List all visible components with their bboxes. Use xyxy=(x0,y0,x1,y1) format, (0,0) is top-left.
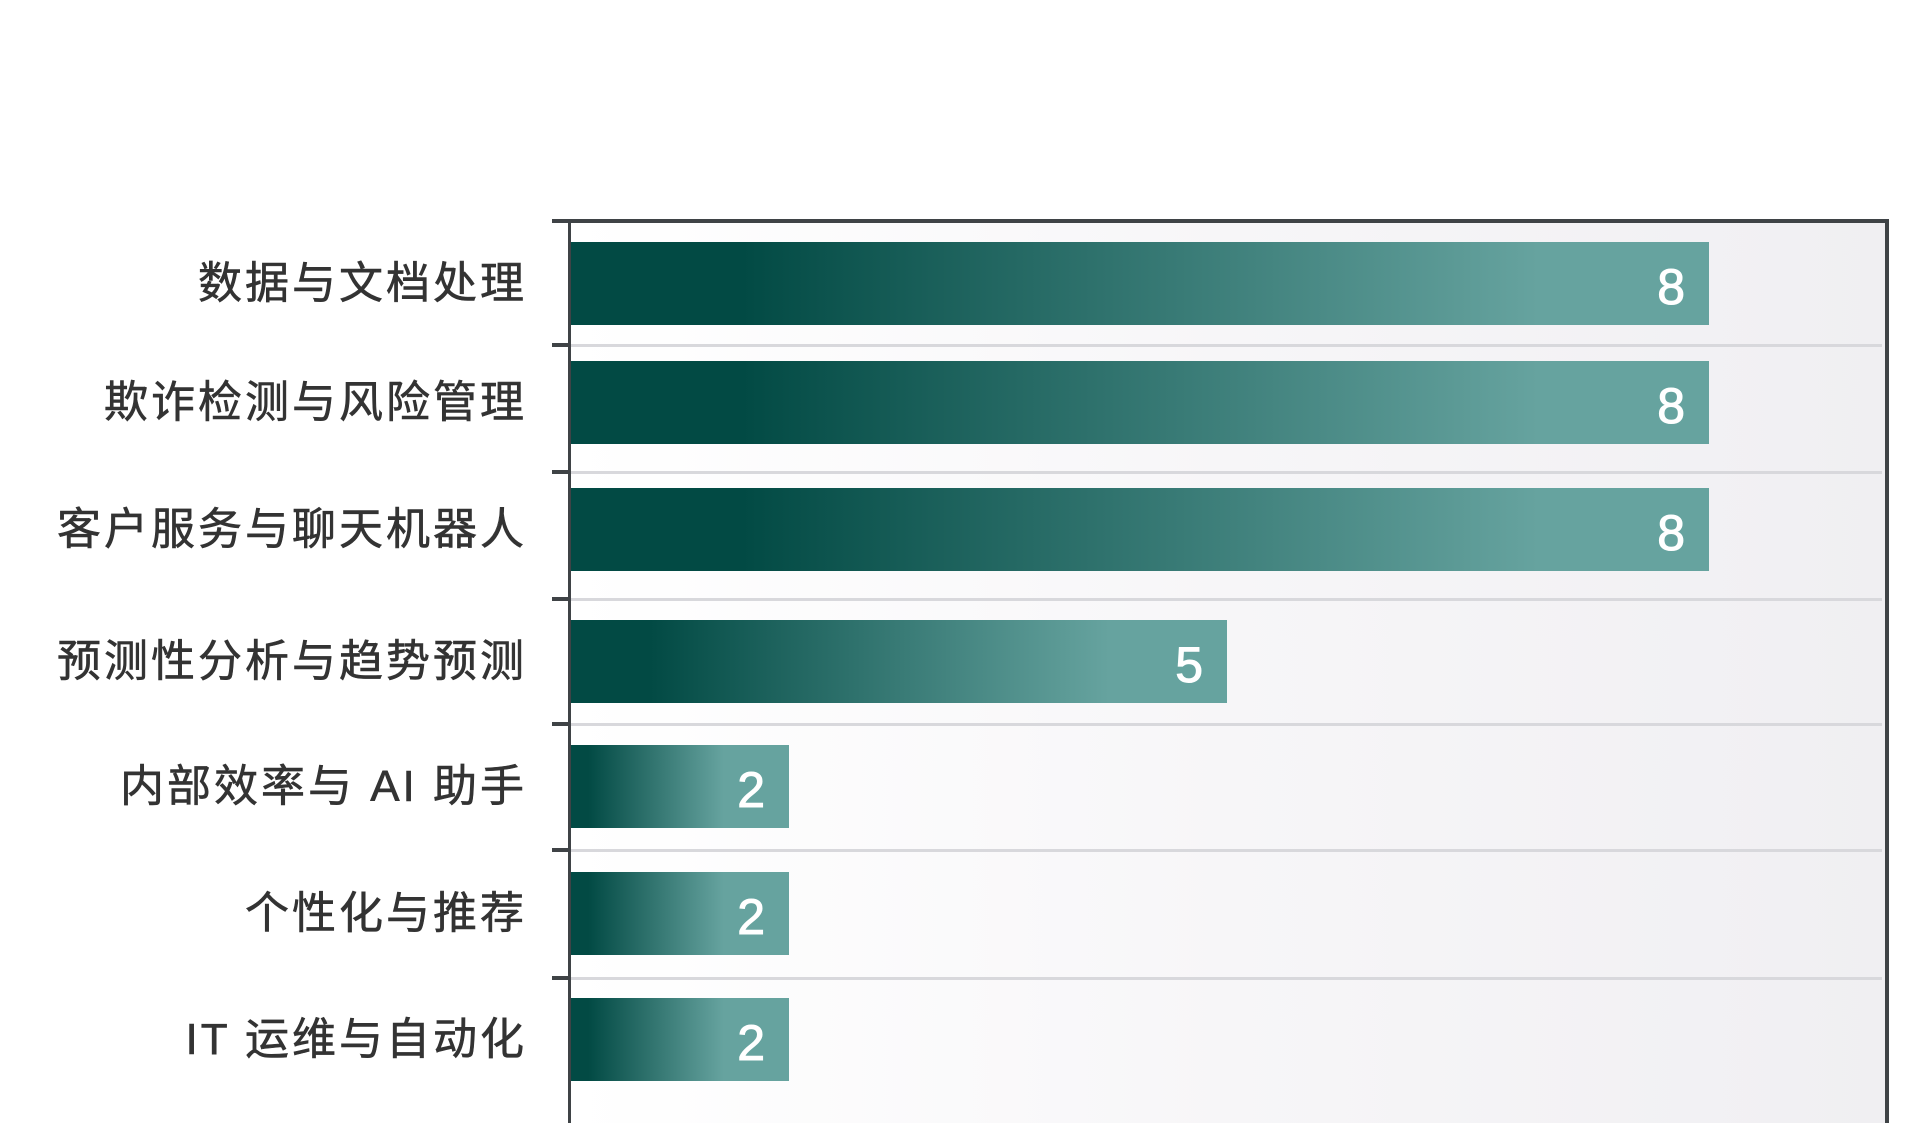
bar 4 xyxy=(571,620,1227,703)
chart frame xyxy=(568,219,1889,1123)
bar 5 xyxy=(571,745,789,828)
label 7: IT 运维与自动化 xyxy=(185,1015,527,1064)
label 4: 预测性分析与趋势预测 xyxy=(57,637,527,686)
bar 4: 5 xyxy=(1175,637,1203,693)
bar 3 xyxy=(571,488,1709,571)
label 6: 个性化与推荐 xyxy=(245,889,527,938)
bar 1: 8 xyxy=(1657,259,1685,315)
bar 7 xyxy=(571,998,789,1081)
bar 2: 8 xyxy=(1657,378,1685,434)
bar 6 xyxy=(571,872,789,955)
bar 2 xyxy=(571,361,1709,444)
bar 1 xyxy=(571,242,1709,325)
label 1: 数据与文档处理 xyxy=(198,259,527,308)
bar chart xyxy=(57,242,1709,1081)
bar 7: 2 xyxy=(737,1015,765,1071)
bar 3: 8 xyxy=(1657,505,1685,561)
label 3: 客户服务与聊天机器人 xyxy=(57,505,527,554)
label 5: 内部效率与 AI 助手 xyxy=(120,762,527,811)
bar 6: 2 xyxy=(737,889,765,945)
label 2: 欺诈检测与风险管理 xyxy=(104,378,527,427)
bar 5: 2 xyxy=(737,762,765,818)
